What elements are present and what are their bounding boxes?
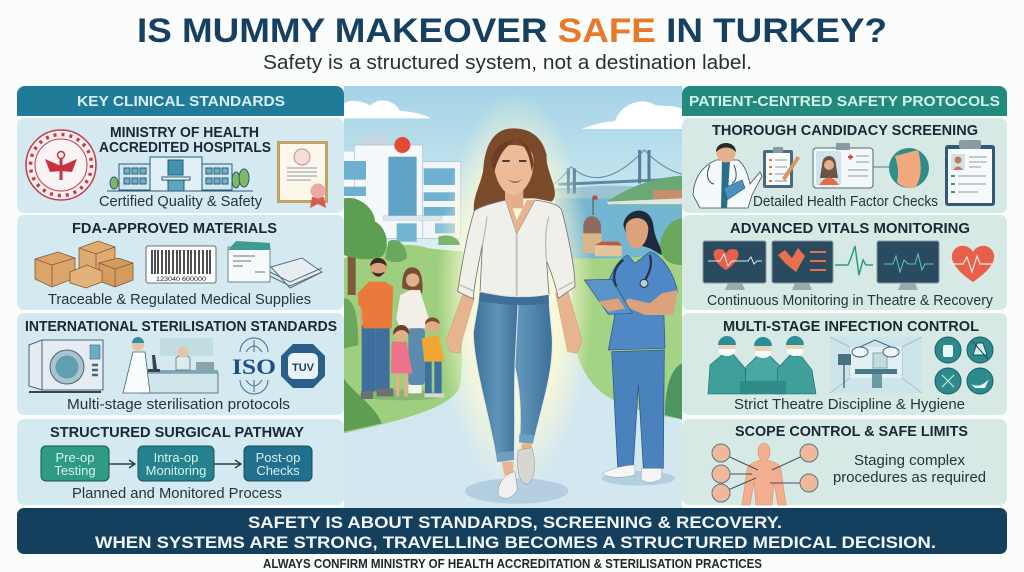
grass right <box>572 252 682 419</box>
icon: tuv badge: TUV <box>292 362 315 374</box>
step: pre-op testing <box>41 446 109 481</box>
heading: infection control: MULTI-STAGE INFECTION CONTROL <box>723 318 979 335</box>
icon: patient record clipboard <box>945 140 995 206</box>
heading: sterilisation standards: INTERNATIONAL STERILISATION STANDARDS <box>25 318 337 335</box>
icon: barcode <box>146 246 216 283</box>
icon: monitor heart <box>703 241 766 290</box>
icon: checklist clipboard <box>763 147 800 188</box>
icon: pulse line <box>835 246 873 275</box>
central illustration <box>344 86 682 510</box>
woman <box>446 128 582 504</box>
jeans <box>473 292 552 462</box>
heading: fda-approved materials: FDA-APPROVED MATERIALS <box>72 220 277 237</box>
icon: heart <box>949 246 998 282</box>
forearms <box>446 290 582 353</box>
heading: candidacy screening: THOROUGH CANDIDACY SCREENING <box>712 122 978 139</box>
step: post-op checks <box>244 446 312 481</box>
caption: theatre discipline: Strict Theatre Discipline & Hygiene <box>734 397 965 413</box>
panel: fda-approved materials <box>17 215 344 310</box>
caption: planned process: Planned and Monitored Process <box>72 486 282 502</box>
heading: ministry of health: MINISTRY OF HEALTH <box>110 124 259 141</box>
panel: international sterilisation standards <box>17 313 344 415</box>
icon: barcode: 123040 600000 <box>156 277 207 283</box>
panel: advanced vitals monitoring <box>682 215 1007 310</box>
icon: steriliser machine <box>29 340 103 392</box>
icon: ministry seal <box>26 130 96 200</box>
panel: multi-stage infection control <box>682 313 1007 415</box>
icon: iso logo <box>232 338 276 394</box>
hospital <box>344 132 461 242</box>
family <box>358 258 445 400</box>
panel: thorough candidacy screening <box>682 118 1007 213</box>
step: intra-op monitoring: Monitoring <box>146 463 206 478</box>
panel: structured surgical pathway <box>17 419 344 505</box>
shoes <box>498 472 517 498</box>
icon: iso logo: ISO <box>232 354 276 379</box>
caption: certified quality: Certified Quality & Safety <box>99 194 263 210</box>
summary banner: WHEN SYSTEMS ARE STRONG, TRAVELLING BECOMES A STRUCTURED MEDICAL DECISION. <box>95 533 936 552</box>
caption: continuous monitoring: Continuous Monitoring in Theatre & Recovery <box>707 293 994 309</box>
grass left <box>344 245 463 433</box>
step: intra-op monitoring: Intra-op <box>154 450 198 465</box>
step: intra-op monitoring <box>138 446 214 481</box>
text: staging complex procedures: procedures as required <box>833 470 986 486</box>
left header: KEY CLINICAL STANDARDS <box>77 93 285 110</box>
bridge and water <box>552 150 682 262</box>
icon: patient card <box>813 143 873 188</box>
maiden tower <box>582 196 622 256</box>
icon: surgeons <box>708 336 816 394</box>
heading: scope control: SCOPE CONTROL & SAFE LIMITS <box>735 423 968 440</box>
caption: sterilisation protocols: Multi-stage sterilisation protocols <box>67 397 290 413</box>
summary banner <box>17 508 1007 554</box>
right header <box>682 86 1007 116</box>
text: staging complex procedures: Staging complex <box>854 453 966 469</box>
left header <box>17 86 344 116</box>
arrow: intra-op to post-op <box>214 460 241 468</box>
step: post-op checks: Post-op <box>256 450 300 465</box>
ankles <box>502 443 532 475</box>
blouse <box>458 200 575 299</box>
cloud right <box>582 101 682 129</box>
icon: hygiene badges <box>935 337 993 394</box>
left column: key clinical standards <box>17 86 344 505</box>
icon: cardboard boxes <box>35 241 133 288</box>
icon: operating theatre <box>830 337 922 393</box>
footer note: ALWAYS CONFIRM MINISTRY OF HEALTH ACCREDITATION & STERILISATION PRACTICES <box>263 557 762 571</box>
right column: patient-centred safety protocols <box>682 86 1007 505</box>
icon: certificate <box>277 141 328 208</box>
icon: doctor <box>693 143 762 208</box>
step: post-op checks: Checks <box>256 463 300 478</box>
trees <box>344 198 682 432</box>
step: pre-op testing: Testing <box>54 463 96 478</box>
arrow: pre-op to intra-op <box>109 460 135 468</box>
title: IS MUMMY MAKEOVER SAFE IN TURKEY? <box>137 12 887 50</box>
right header: PATIENT-CENTRED SAFETY PROTOCOLS <box>689 93 1000 110</box>
caption: health factor checks: Detailed Health Factor Checks <box>753 194 938 210</box>
icon: tuv badge <box>281 344 325 388</box>
nurse <box>584 211 678 486</box>
subtitle: Safety is a structured system, not a destination label. <box>263 52 752 74</box>
caption: traceable supplies: Traceable & Regulated Medical Supplies <box>48 292 311 308</box>
panel: ministry of health accredited hospitals <box>17 118 344 213</box>
icon: body diagram <box>712 443 818 505</box>
heading: ministry of health: ACCREDITED HOSPITALS <box>99 139 271 156</box>
heading: vitals monitoring: ADVANCED VITALS MONITORING <box>730 220 970 237</box>
heading: surgical pathway: STRUCTURED SURGICAL PATHWAY <box>50 424 304 441</box>
icon: monitor ecg <box>877 241 939 290</box>
icon: abdomen check <box>873 148 929 188</box>
panel: scope control and safe limits <box>682 419 1007 505</box>
icon: laboratory scene <box>123 337 218 393</box>
summary banner: SAFETY IS ABOUT STANDARDS, SCREENING & RECOVERY. <box>248 513 782 532</box>
icon: hospital building <box>107 157 253 191</box>
icon: medical supplies <box>228 241 322 288</box>
icon: monitor waveform <box>772 241 833 290</box>
step: pre-op testing: Pre-op <box>55 450 95 465</box>
central glow <box>440 101 590 474</box>
cloud left <box>344 100 432 118</box>
